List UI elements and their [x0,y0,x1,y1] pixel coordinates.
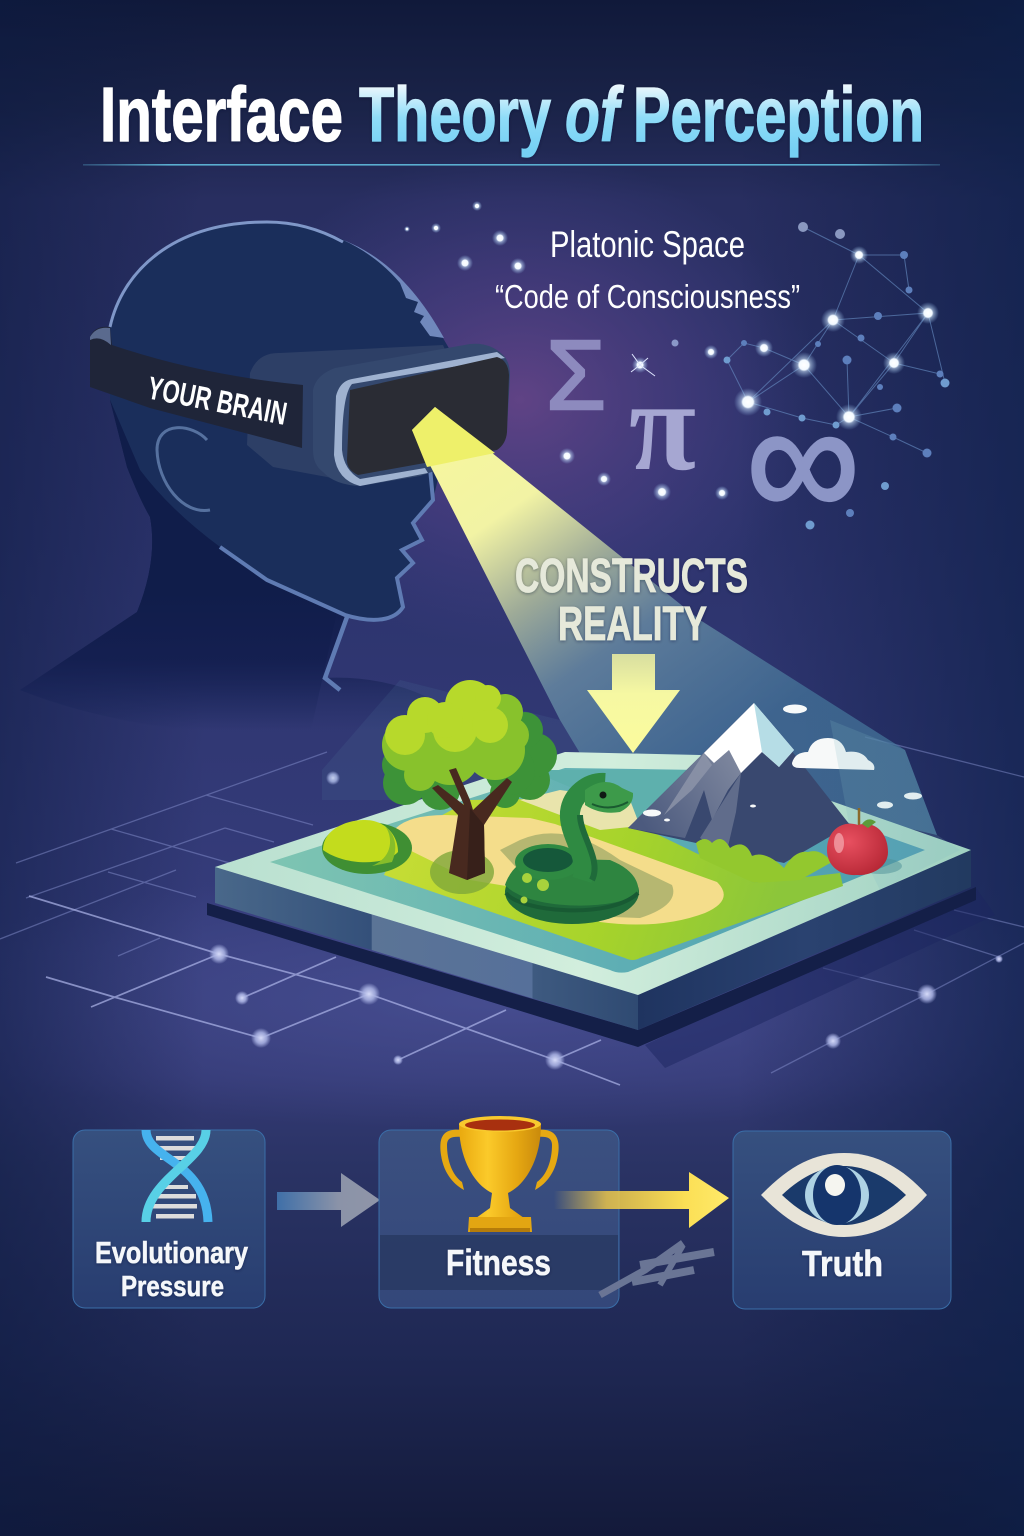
title: Interface [100,72,343,158]
title: Perception [633,72,924,158]
constellation [404,201,950,530]
grid nodes [209,771,1003,1070]
flow card: evolutionary pressure [73,1130,265,1308]
flow card: fitness [379,1116,619,1308]
down arrow [587,654,680,753]
headset rear housing [247,345,450,485]
title [100,72,924,158]
tree [382,680,557,880]
green land [384,798,843,960]
constructs reality label: REALITY [558,598,707,651]
snake [505,782,639,924]
math symbols [546,320,860,552]
strap label: YOUR BRAIN [145,370,290,432]
snow cap [704,703,794,773]
bush [322,820,412,874]
ear [157,428,210,511]
snake shadow [500,833,673,918]
foothill bushes [696,839,832,883]
light beam [322,407,937,835]
goggle frame [313,344,510,486]
arrow: pressure to fitness [277,1173,380,1227]
head strap [90,327,303,448]
title: Theory [359,72,551,158]
card label [95,1235,249,1303]
goggle screen [347,357,509,475]
sand path [395,815,724,925]
math symbols: π [629,354,696,498]
constructs reality label: CONSTRUCTS [515,550,748,603]
title: of [565,72,624,158]
mountain [628,703,850,883]
not-equal sign [600,1243,714,1295]
arrow: fitness to truth [554,1172,729,1228]
platform top surface [215,752,971,995]
icon: eye [761,1153,927,1237]
platform base [207,887,976,1047]
isometric grid floor [0,737,1024,1073]
card label: Pressure [121,1271,224,1303]
water ring [270,768,925,973]
Platonic Space label: Platonic Space [550,224,745,265]
math symbols: ∞ [746,368,860,552]
constructs reality label [515,550,748,651]
head outline [110,222,343,327]
flow card: truth [733,1131,951,1309]
math symbols: Σ [546,320,606,430]
platform cast shadow [645,888,995,1068]
card label: Evolutionary [95,1235,249,1270]
icon: DNA helix [146,1130,208,1222]
apple [827,808,902,875]
tree shadow [430,850,494,894]
Platonic Space label: “Code of Consciousness” [495,278,800,315]
Platonic Space label [495,224,800,315]
platform sides [215,867,638,1030]
clouds [643,704,922,822]
beam overlay on platform [830,720,960,890]
grid circuit lines [29,896,620,1085]
isometric platform [207,680,976,1047]
label band [380,1235,618,1290]
icon: trophy [440,1116,559,1232]
card label: Truth [802,1243,883,1284]
card label: Fitness [446,1242,551,1283]
head silhouette with shoulders [20,222,450,737]
VR headset [90,327,510,486]
